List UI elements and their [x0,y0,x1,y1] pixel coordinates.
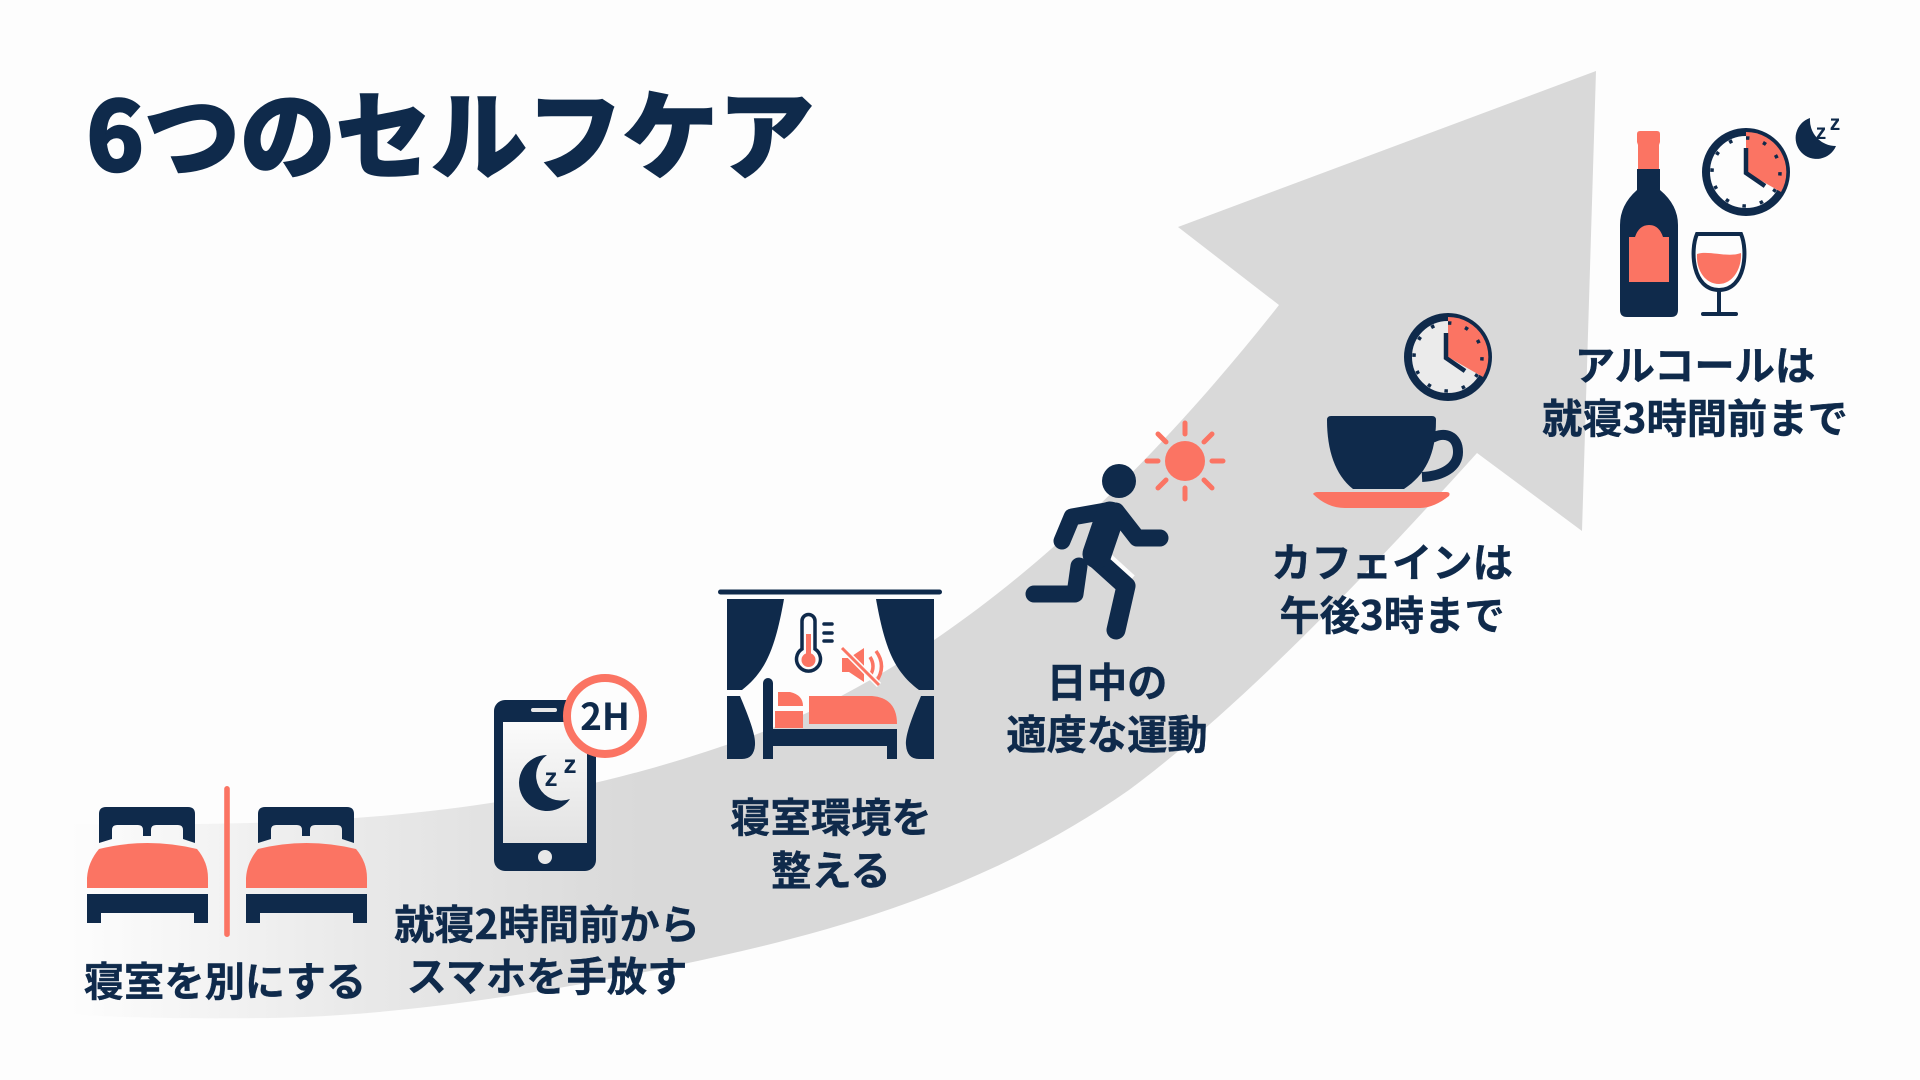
label: 寝室環境を 整える [730,796,932,894]
icon: moon with zzz [1796,112,1840,159]
label: 寝室環境を 整える: 寝室環境を [730,796,932,841]
item 6: alcohol until 3 hours before bed [1542,112,1848,445]
label: 就寝2時間前から スマホを手放す: 就寝2時間前から [394,892,700,951]
label: 日中の 適度な運動: 適度な運動 [1006,713,1208,758]
icon: smartphone with 2H badge [494,678,643,871]
icon: bedroom with curtains, thermometer and mute speaker [718,590,942,759]
item 2: put the smartphone away [394,678,700,1000]
label: 就寝2時間前から スマホを手放す [394,892,700,1000]
label: カフェインは 午後3時まで: カフェインは [1271,541,1513,586]
label: 日中の 適度な運動 [1006,661,1208,758]
label: 日中の 適度な運動: 日中の [1047,661,1167,706]
item 4: moderate daytime exercise [1006,423,1223,758]
icon: smartphone with 2H badge: z [544,762,558,792]
icon: coffee cup and saucer [1313,416,1458,508]
icon: runner [1034,464,1160,630]
item 3: adjust the bedroom environment [718,590,942,894]
item 5: caffeine until 3pm [1271,317,1513,642]
label: アルコールは 就寝3時間前まで [1542,344,1848,445]
icon: smartphone with 2H badge: z [564,749,576,779]
icon: wine bottle [1620,131,1678,317]
label: 寝室を別にする: 寝室を別にする [84,960,366,1005]
icon: moon with zzz: z [1830,112,1840,135]
title: 6つのセルフケア [86,60,814,199]
item 1: separate bedrooms [84,786,367,1005]
icon: clock [1408,317,1488,397]
label: カフェインは 午後3時まで [1271,541,1513,642]
label: 就寝2時間前から スマホを手放す: スマホを手放す [407,955,687,1000]
label: アルコールは 就寝3時間前まで: アルコールは [1575,344,1815,389]
icon: clock [1706,132,1786,212]
growth arrow [70,71,1596,1018]
icon: two beds with divider [87,786,367,937]
icon: moon with zzz: z [1816,121,1826,144]
icon: smartphone with 2H badge: 2H [580,687,630,741]
label: カフェインは 午後3時まで: 午後3時まで [1279,583,1505,642]
icon: wine glass [1694,234,1744,314]
icon: sun [1147,423,1223,499]
label: アルコールは 就寝3時間前まで: 就寝3時間前まで [1542,386,1848,445]
label: 寝室環境を 整える: 整える [771,849,891,894]
